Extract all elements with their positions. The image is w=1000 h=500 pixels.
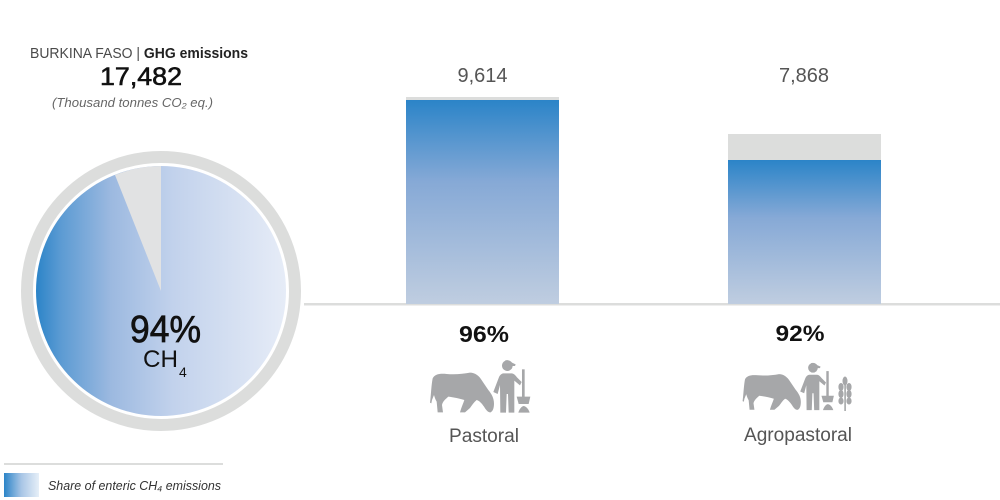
enteric share slice [36,166,286,416]
agropastoral total: 7,868 [779,65,829,87]
wheat [838,376,852,411]
agropastoral share: 92% [776,321,824,346]
icon: cow, farmer and wheat (agropastoral) [743,363,852,411]
icon: cow and farmer (pastoral) [430,360,530,413]
unit: (Thousand tonnes CO₂ eq.) [52,95,213,110]
legend swatch [4,473,39,497]
title block [30,46,248,110]
agropastoral label: Agropastoral [744,425,852,446]
pie chart [27,157,295,425]
pie label: CH [143,346,178,373]
pastoral label: Pastoral [449,426,519,447]
pastoral total: 9,614 [458,65,508,87]
bar: pastoral [406,97,559,304]
other share slice [115,166,161,291]
axis [304,303,1000,306]
pie chart: 4 [179,364,187,380]
total value: 17,482 [100,63,182,91]
pastoral share: 96% [459,321,509,347]
legend label: Share of enteric CH₄ emissions [48,479,221,493]
outer ring [27,157,295,425]
bar: agropastoral [728,134,881,304]
legend [4,463,223,497]
pie value: 94% [130,309,201,351]
heading: BURKINA FASO | GHG emissions [30,46,248,62]
